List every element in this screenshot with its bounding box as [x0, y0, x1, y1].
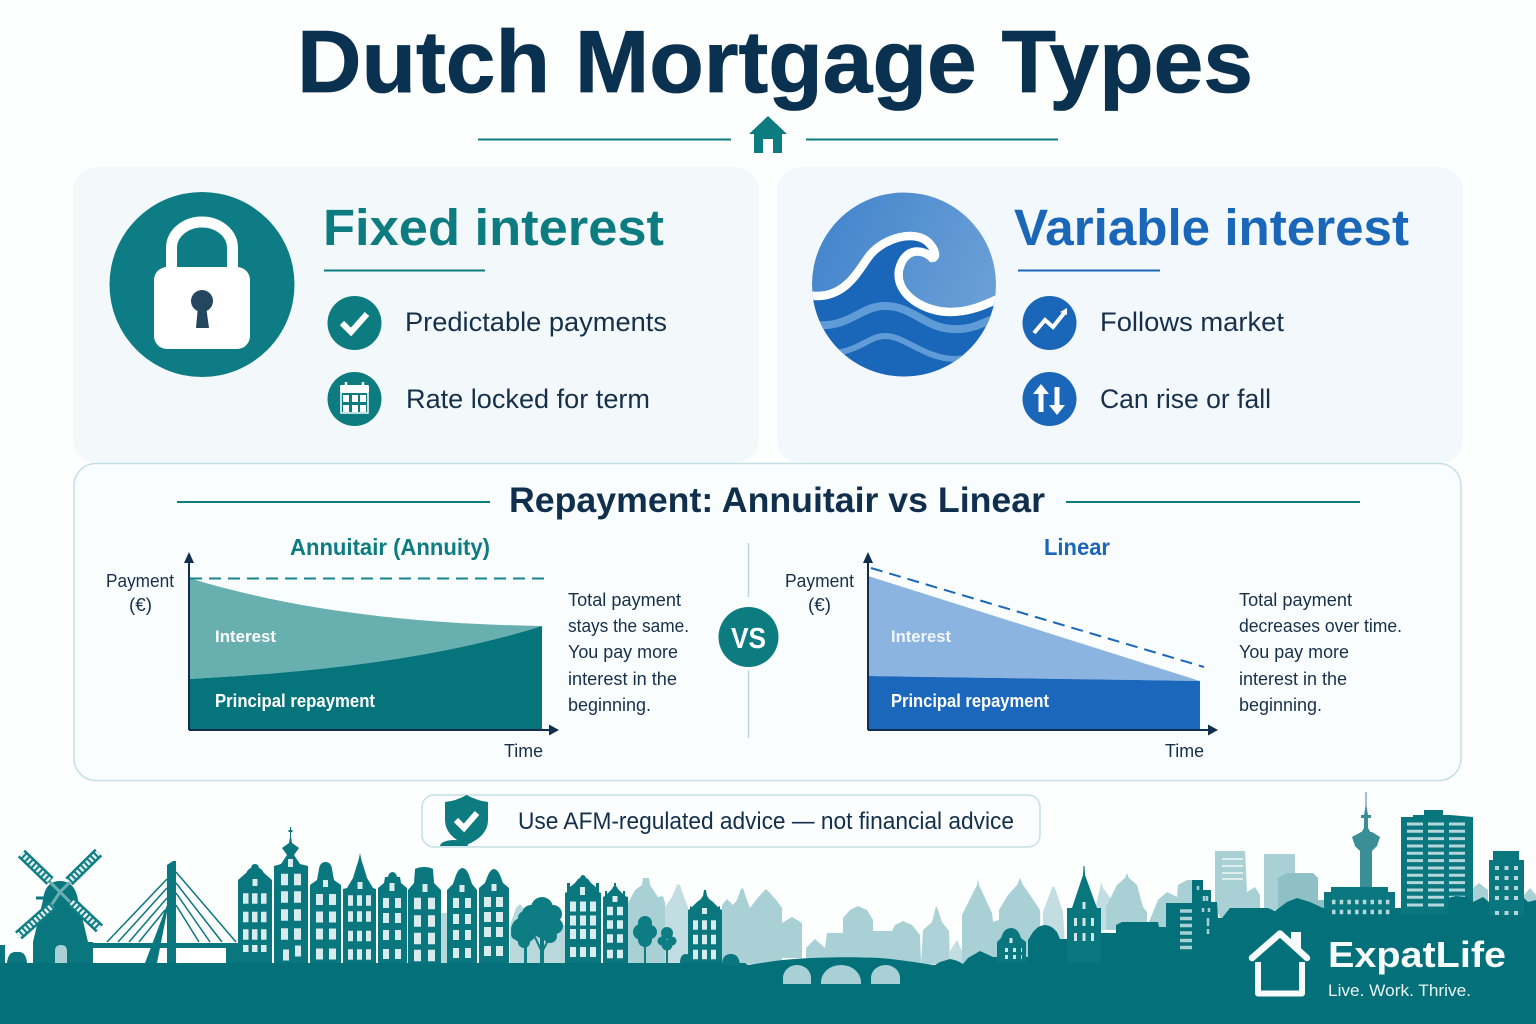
skyline: tall tower block — [1401, 810, 1473, 915]
text: linear explanation: interest in the — [1239, 669, 1347, 689]
icon: trend line — [1022, 296, 1076, 350]
chart: linear: Principal repayment — [891, 691, 1049, 711]
icon: wave — [806, 190, 1000, 380]
skyline: right building — [1489, 851, 1524, 915]
text: linear explanation: decreases over time. — [1239, 616, 1402, 636]
logo tagline: Live. Work. Thrive. — [1328, 981, 1471, 1000]
skyline: dark church and small houses — [997, 866, 1101, 963]
icon: cable-stayed bridge — [93, 861, 238, 963]
callout: AFM advice — [422, 795, 1040, 847]
chart: linear: (€) — [808, 595, 831, 615]
skyline: canal houses — [238, 827, 722, 963]
text: linear explanation: beginning. — [1239, 695, 1322, 715]
skyline: broadcast tower — [1352, 792, 1380, 890]
chart: linear: Interest — [891, 627, 951, 646]
text: follows market: Follows market — [1100, 307, 1284, 337]
text: rate locked for term: Rate locked for term — [406, 384, 650, 414]
skyline: canal bridge arches — [783, 965, 900, 984]
chart: annuity: Principal repayment — [215, 691, 375, 711]
logo wordmark: ExpatLife — [1328, 934, 1506, 975]
chart: linear: Time — [1165, 741, 1204, 761]
chart: linear — [785, 534, 1218, 761]
heading: repayment: Repayment: Annuitair vs Linear — [509, 481, 1045, 520]
chart: annuity — [106, 534, 559, 761]
text: annuity explanation: interest in the — [568, 669, 677, 689]
text: linear explanation: Total payment — [1239, 590, 1352, 610]
skyline: low building by tower — [1324, 887, 1395, 912]
chart: annuity: (€) — [129, 595, 152, 615]
vs badge — [718, 543, 778, 738]
text: annuity explanation — [568, 590, 689, 715]
text: advice disclaimer: Use AFM-regulated advice — not financial advice — [518, 808, 1014, 835]
text: annuity explanation: beginning. — [568, 695, 651, 715]
skyline: church windows — [1005, 902, 1094, 957]
title: Dutch Mortgage Types — [297, 12, 1253, 111]
icon: shield — [440, 795, 488, 846]
panel: variable interest — [777, 167, 1463, 463]
logo: ExpatLife — [1252, 932, 1506, 1000]
icon: check — [328, 296, 382, 350]
chart title: linear: Linear — [1044, 534, 1110, 560]
text: linear explanation: You pay more — [1239, 642, 1349, 662]
text: can rise or fall: Can rise or fall — [1100, 384, 1271, 414]
skyline: trees — [511, 897, 676, 963]
text: annuity explanation: stays the same. — [568, 616, 689, 636]
icon: windmill — [0, 852, 100, 963]
skyline: house windows — [243, 859, 718, 956]
heading: variable interest: Variable interest — [1014, 199, 1409, 256]
chart title: annuity: Annuitair (Annuity) — [290, 534, 490, 560]
heading: fixed interest: Fixed interest — [323, 199, 664, 256]
panel: fixed interest — [73, 167, 759, 463]
panel: repayment comparison — [74, 464, 1461, 780]
chart: annuity: Interest — [215, 627, 276, 646]
skyline: office block — [1180, 886, 1209, 948]
icon: logo house — [1252, 932, 1307, 994]
icon: padlock — [110, 192, 294, 377]
icon: up down arrows — [1022, 372, 1076, 426]
chart: annuity: Payment — [106, 571, 174, 591]
text: predictable payments: Predictable payments — [405, 307, 667, 337]
skyline background: pale buildings — [441, 851, 1536, 964]
chart: annuity: Time — [504, 741, 543, 761]
text: annuity explanation: You pay more — [568, 642, 678, 662]
title divider with house icon — [478, 116, 1058, 153]
chart: linear: Payment — [785, 571, 854, 591]
skyline: shoreline shrubs — [680, 954, 740, 965]
skyline: ground and hills — [0, 880, 1536, 1024]
text: annuity explanation: Total payment — [568, 590, 681, 610]
icon: calendar — [328, 372, 382, 426]
text: linear explanation — [1239, 590, 1402, 715]
vs badge: VS — [731, 623, 766, 655]
